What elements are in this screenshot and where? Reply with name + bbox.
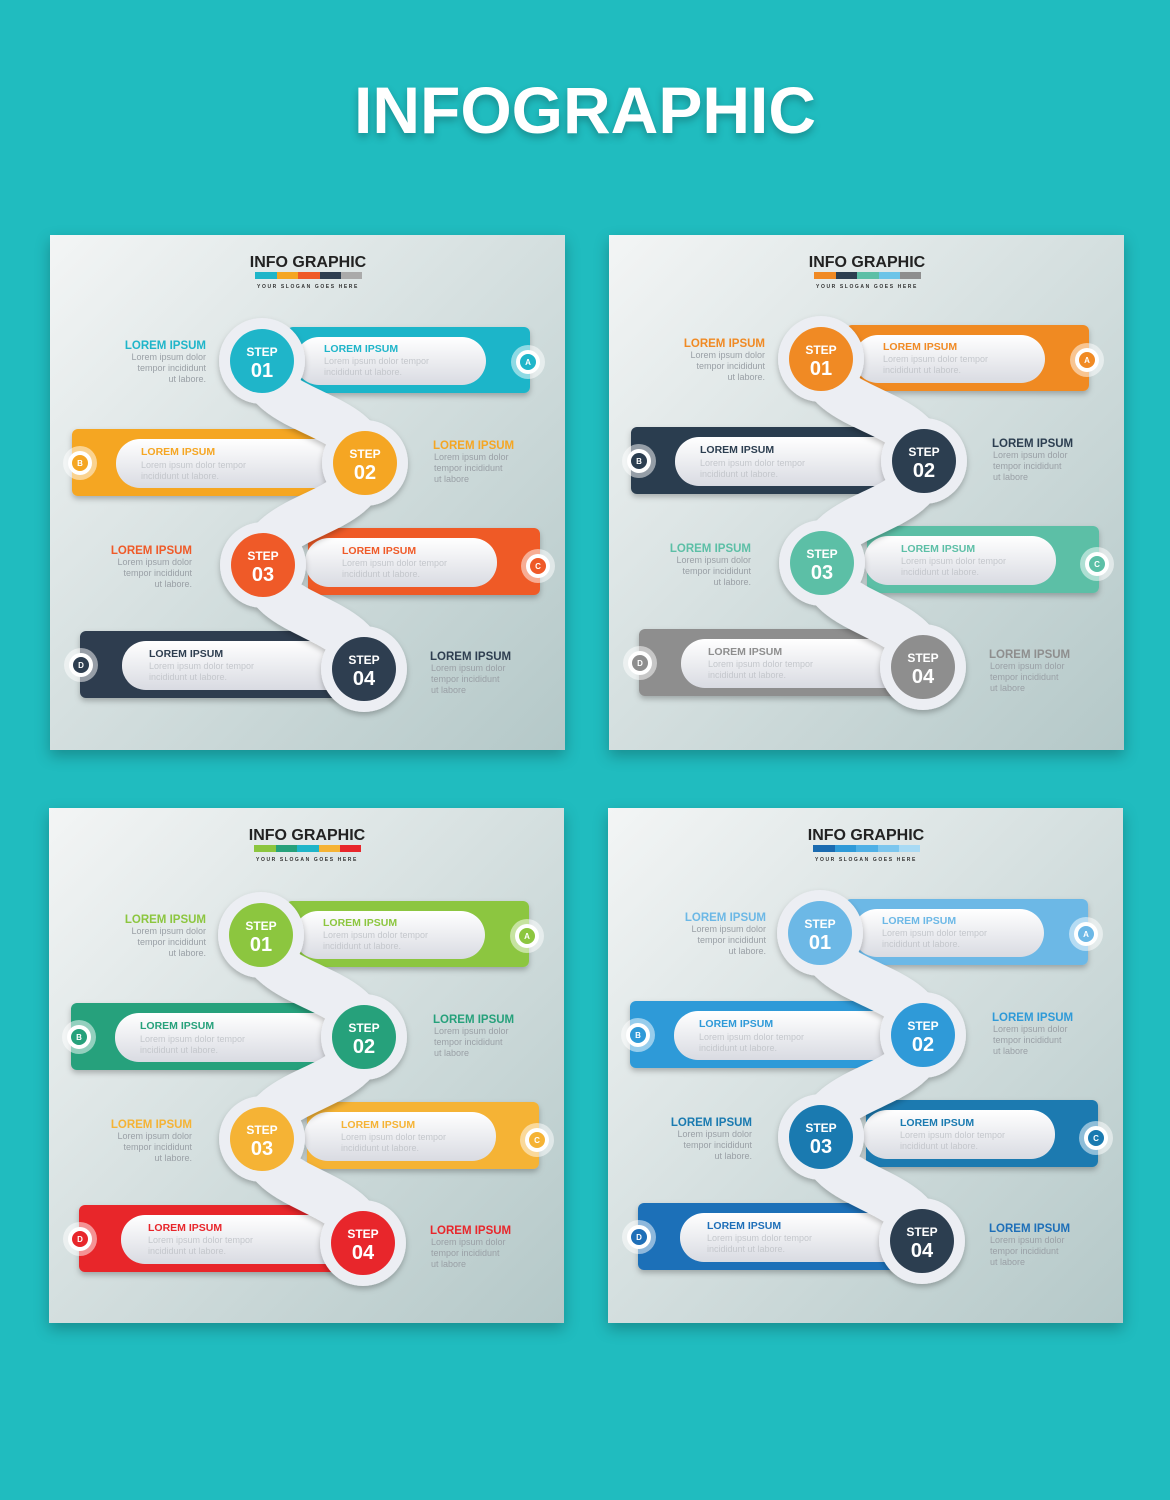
side texts: Lorem ipsum dolor xyxy=(691,924,766,934)
side texts: Lorem ipsum dolor xyxy=(993,1024,1068,1034)
pills: Lorem ipsum dolor tempor xyxy=(882,928,987,938)
side texts: tempor incididunt xyxy=(431,1248,500,1258)
pills: Lorem ipsum dolor tempor xyxy=(324,356,429,366)
side texts: ut labore. xyxy=(713,577,751,587)
badges: D xyxy=(78,661,84,670)
pills: incididunt ut labore. xyxy=(901,567,979,577)
pills xyxy=(674,909,1055,1262)
side texts: ut labore. xyxy=(154,579,192,589)
pills: LOREM IPSUM xyxy=(140,1020,214,1032)
pills: LOREM IPSUM xyxy=(149,648,223,660)
header: INFO GRAPHIC xyxy=(249,827,366,844)
side texts: LOREM IPSUM xyxy=(992,1012,1073,1024)
badges: A xyxy=(525,358,531,367)
side texts xyxy=(111,340,514,695)
header xyxy=(809,254,926,290)
badges: B xyxy=(76,1033,82,1042)
side texts xyxy=(670,338,1073,693)
badges: A xyxy=(524,932,530,941)
step circles: 01 xyxy=(809,932,831,954)
bars xyxy=(631,325,1099,696)
side texts: ut labore. xyxy=(727,372,765,382)
side texts: ut labore. xyxy=(168,948,206,958)
pills: LOREM IPSUM xyxy=(700,444,774,456)
step circles: STEP xyxy=(246,1123,278,1137)
badges: A xyxy=(1084,356,1090,365)
step circles: 02 xyxy=(354,462,376,484)
side texts: tempor incididunt xyxy=(990,672,1059,682)
badges: B xyxy=(77,459,83,468)
side texts: Lorem ipsum dolor xyxy=(993,450,1068,460)
step circles: 02 xyxy=(913,460,935,482)
pills: incididunt ut labore. xyxy=(900,1141,978,1151)
step circles: 03 xyxy=(251,1138,273,1160)
side texts: ut labore xyxy=(431,685,466,695)
step circles: STEP xyxy=(907,651,939,665)
pills: LOREM IPSUM xyxy=(708,646,782,658)
step circles: STEP xyxy=(805,343,837,357)
step circles xyxy=(788,901,955,1273)
pills: incididunt ut labore. xyxy=(342,569,420,579)
side texts xyxy=(671,912,1073,1267)
side texts: ut labore xyxy=(431,1259,466,1269)
step circles: 01 xyxy=(250,934,272,956)
side texts: LOREM IPSUM xyxy=(125,340,206,352)
pills: LOREM IPSUM xyxy=(699,1018,773,1030)
bars xyxy=(71,901,539,1272)
side texts: LOREM IPSUM xyxy=(992,438,1073,450)
pills: incididunt ut labore. xyxy=(341,1143,419,1153)
side texts: LOREM IPSUM xyxy=(430,1225,511,1237)
side texts: tempor incididunt xyxy=(993,461,1062,471)
pills: LOREM IPSUM xyxy=(882,915,956,927)
pills: incididunt ut labore. xyxy=(141,471,219,481)
badges: A xyxy=(1083,930,1089,939)
side texts: tempor incididunt xyxy=(990,1246,1059,1256)
step circles: 03 xyxy=(810,1136,832,1158)
header xyxy=(808,827,925,863)
header: YOUR SLOGAN GOES HERE xyxy=(816,284,918,290)
side texts: Lorem ipsum dolor xyxy=(431,663,506,673)
step circles: STEP xyxy=(806,547,838,561)
pills: Lorem ipsum dolor tempor xyxy=(708,659,813,669)
pills: incididunt ut labore. xyxy=(324,367,402,377)
pills: Lorem ipsum dolor tempor xyxy=(699,1032,804,1042)
side texts: Lorem ipsum dolor xyxy=(117,557,192,567)
step circles: 03 xyxy=(811,562,833,584)
side texts: LOREM IPSUM xyxy=(433,440,514,452)
pills: incididunt ut labore. xyxy=(707,1244,785,1254)
side texts: Lorem ipsum dolor xyxy=(117,1131,192,1141)
badges: D xyxy=(77,1235,83,1244)
pills: LOREM IPSUM xyxy=(324,343,398,355)
pills: Lorem ipsum dolor tempor xyxy=(700,458,805,468)
side texts: ut labore xyxy=(993,472,1028,482)
pills: LOREM IPSUM xyxy=(148,1222,222,1234)
step circles: STEP xyxy=(804,917,836,931)
side texts: LOREM IPSUM xyxy=(125,914,206,926)
side texts: LOREM IPSUM xyxy=(111,545,192,557)
side texts: tempor incididunt xyxy=(123,1142,192,1152)
connector xyxy=(218,892,407,1286)
pills xyxy=(115,911,496,1264)
pills: LOREM IPSUM xyxy=(323,917,397,929)
badges: C xyxy=(1094,560,1100,569)
pills: Lorem ipsum dolor tempor xyxy=(341,1132,446,1142)
badges: B xyxy=(635,1031,641,1040)
header: INFO GRAPHIC xyxy=(808,827,925,844)
pills: incididunt ut labore. xyxy=(149,672,227,682)
side texts: LOREM IPSUM xyxy=(989,649,1070,661)
side texts: LOREM IPSUM xyxy=(433,1014,514,1026)
side texts: tempor incididunt xyxy=(993,1035,1062,1045)
panel: version 2 xyxy=(609,235,1124,750)
header: INFO GRAPHIC xyxy=(809,254,926,271)
side texts: tempor incididunt xyxy=(137,363,206,373)
side texts: LOREM IPSUM xyxy=(684,338,765,350)
header: YOUR SLOGAN GOES HERE xyxy=(815,857,917,863)
side texts: LOREM IPSUM xyxy=(430,651,511,663)
badges: C xyxy=(1093,1134,1099,1143)
bars xyxy=(630,899,1098,1270)
pills: Lorem ipsum dolor tempor xyxy=(342,558,447,568)
badges xyxy=(622,343,1114,680)
pills: LOREM IPSUM xyxy=(342,545,416,557)
side texts: tempor incididunt xyxy=(683,1140,752,1150)
pills: incididunt ut labore. xyxy=(700,469,778,479)
pills: Lorem ipsum dolor tempor xyxy=(141,460,246,470)
pills: Lorem ipsum dolor tempor xyxy=(901,556,1006,566)
side texts: tempor incididunt xyxy=(434,1037,503,1047)
header: YOUR SLOGAN GOES HERE xyxy=(256,857,358,863)
side texts: LOREM IPSUM xyxy=(111,1119,192,1131)
pills: LOREM IPSUM xyxy=(900,1117,974,1129)
side texts: Lorem ipsum dolor xyxy=(676,555,751,565)
pills: incididunt ut labore. xyxy=(882,939,960,949)
pills: LOREM IPSUM xyxy=(901,543,975,555)
step circles: STEP xyxy=(908,445,940,459)
side texts: tempor incididunt xyxy=(697,935,766,945)
side texts: LOREM IPSUM xyxy=(685,912,766,924)
pills xyxy=(116,337,497,690)
pills: LOREM IPSUM xyxy=(883,341,957,353)
step circles xyxy=(789,327,956,699)
pills: Lorem ipsum dolor tempor xyxy=(149,661,254,671)
badges: C xyxy=(535,562,541,571)
side texts: Lorem ipsum dolor xyxy=(690,350,765,360)
side texts: Lorem ipsum dolor xyxy=(434,1026,509,1036)
badges xyxy=(63,345,555,682)
badges: B xyxy=(636,457,642,466)
step circles: 02 xyxy=(353,1036,375,1058)
step circles: STEP xyxy=(348,653,380,667)
step circles: STEP xyxy=(245,919,277,933)
step circles: STEP xyxy=(349,447,381,461)
step circles: STEP xyxy=(348,1021,380,1035)
side texts: Lorem ipsum dolor xyxy=(677,1129,752,1139)
pills: incididunt ut labore. xyxy=(148,1246,226,1256)
side texts: Lorem ipsum dolor xyxy=(131,926,206,936)
side texts: ut labore. xyxy=(714,1151,752,1161)
side texts: ut labore. xyxy=(168,374,206,384)
side texts: Lorem ipsum dolor xyxy=(434,452,509,462)
pills: Lorem ipsum dolor tempor xyxy=(148,1235,253,1245)
step circles: 03 xyxy=(252,564,274,586)
header xyxy=(249,827,366,863)
pills: LOREM IPSUM xyxy=(707,1220,781,1232)
side texts: ut labore. xyxy=(728,946,766,956)
step circles xyxy=(230,329,397,701)
header: YOUR SLOGAN GOES HERE xyxy=(257,284,359,290)
side texts: ut labore xyxy=(990,683,1025,693)
pills: Lorem ipsum dolor tempor xyxy=(883,354,988,364)
bars xyxy=(72,327,540,698)
step circles: 04 xyxy=(353,668,376,690)
pills: LOREM IPSUM xyxy=(141,446,215,458)
connector xyxy=(778,316,967,710)
pills: incididunt ut labore. xyxy=(883,365,961,375)
step circles: STEP xyxy=(246,345,278,359)
badges: D xyxy=(636,1233,642,1242)
step circles: STEP xyxy=(247,549,279,563)
step circles: STEP xyxy=(907,1019,939,1033)
side texts: tempor incididunt xyxy=(696,361,765,371)
badges xyxy=(62,919,554,1256)
step circles: 04 xyxy=(352,1242,375,1264)
side texts: Lorem ipsum dolor xyxy=(990,1235,1065,1245)
side texts: Lorem ipsum dolor xyxy=(431,1237,506,1247)
side texts: LOREM IPSUM xyxy=(989,1223,1070,1235)
badges: C xyxy=(534,1136,540,1145)
side texts: ut labore xyxy=(434,474,469,484)
side texts: LOREM IPSUM xyxy=(670,543,751,555)
connector xyxy=(777,890,966,1284)
side texts xyxy=(111,914,514,1269)
pills: incididunt ut labore. xyxy=(140,1045,218,1055)
side texts: ut labore xyxy=(990,1257,1025,1267)
side texts: ut labore. xyxy=(154,1153,192,1163)
panel: version 3 xyxy=(49,808,564,1323)
step circles: 01 xyxy=(251,360,273,382)
pills: incididunt ut labore. xyxy=(699,1043,777,1053)
step circles: STEP xyxy=(906,1225,938,1239)
badges xyxy=(621,917,1113,1254)
panel: version 4 xyxy=(608,808,1123,1323)
step circles: 04 xyxy=(911,1240,934,1262)
header: INFO GRAPHIC xyxy=(250,254,367,271)
panel: version 1 xyxy=(50,235,565,750)
pills xyxy=(675,335,1056,688)
step circles: 02 xyxy=(912,1034,934,1056)
side texts: tempor incididunt xyxy=(434,463,503,473)
step circles: 04 xyxy=(912,666,935,688)
pills: Lorem ipsum dolor tempor xyxy=(323,930,428,940)
side texts: tempor incididunt xyxy=(123,568,192,578)
step circles: STEP xyxy=(805,1121,837,1135)
header xyxy=(250,254,367,290)
step circles: 01 xyxy=(810,358,832,380)
pills: Lorem ipsum dolor tempor xyxy=(140,1034,245,1044)
side texts: ut labore xyxy=(434,1048,469,1058)
side texts: tempor incididunt xyxy=(431,674,500,684)
pills: Lorem ipsum dolor tempor xyxy=(707,1233,812,1243)
connector xyxy=(219,318,408,712)
side texts: Lorem ipsum dolor xyxy=(131,352,206,362)
badges: D xyxy=(637,659,643,668)
side texts: tempor incididunt xyxy=(137,937,206,947)
side texts: LOREM IPSUM xyxy=(671,1117,752,1129)
side texts: ut labore xyxy=(993,1046,1028,1056)
pills: Lorem ipsum dolor tempor xyxy=(900,1130,1005,1140)
pills: LOREM IPSUM xyxy=(341,1119,415,1131)
step circles: STEP xyxy=(347,1227,379,1241)
pills: incididunt ut labore. xyxy=(708,670,786,680)
side texts: tempor incididunt xyxy=(682,566,751,576)
pills: incididunt ut labore. xyxy=(323,941,401,951)
step circles xyxy=(229,903,396,1275)
side texts: Lorem ipsum dolor xyxy=(990,661,1065,671)
title: INFOGRAPHIC xyxy=(354,73,816,147)
